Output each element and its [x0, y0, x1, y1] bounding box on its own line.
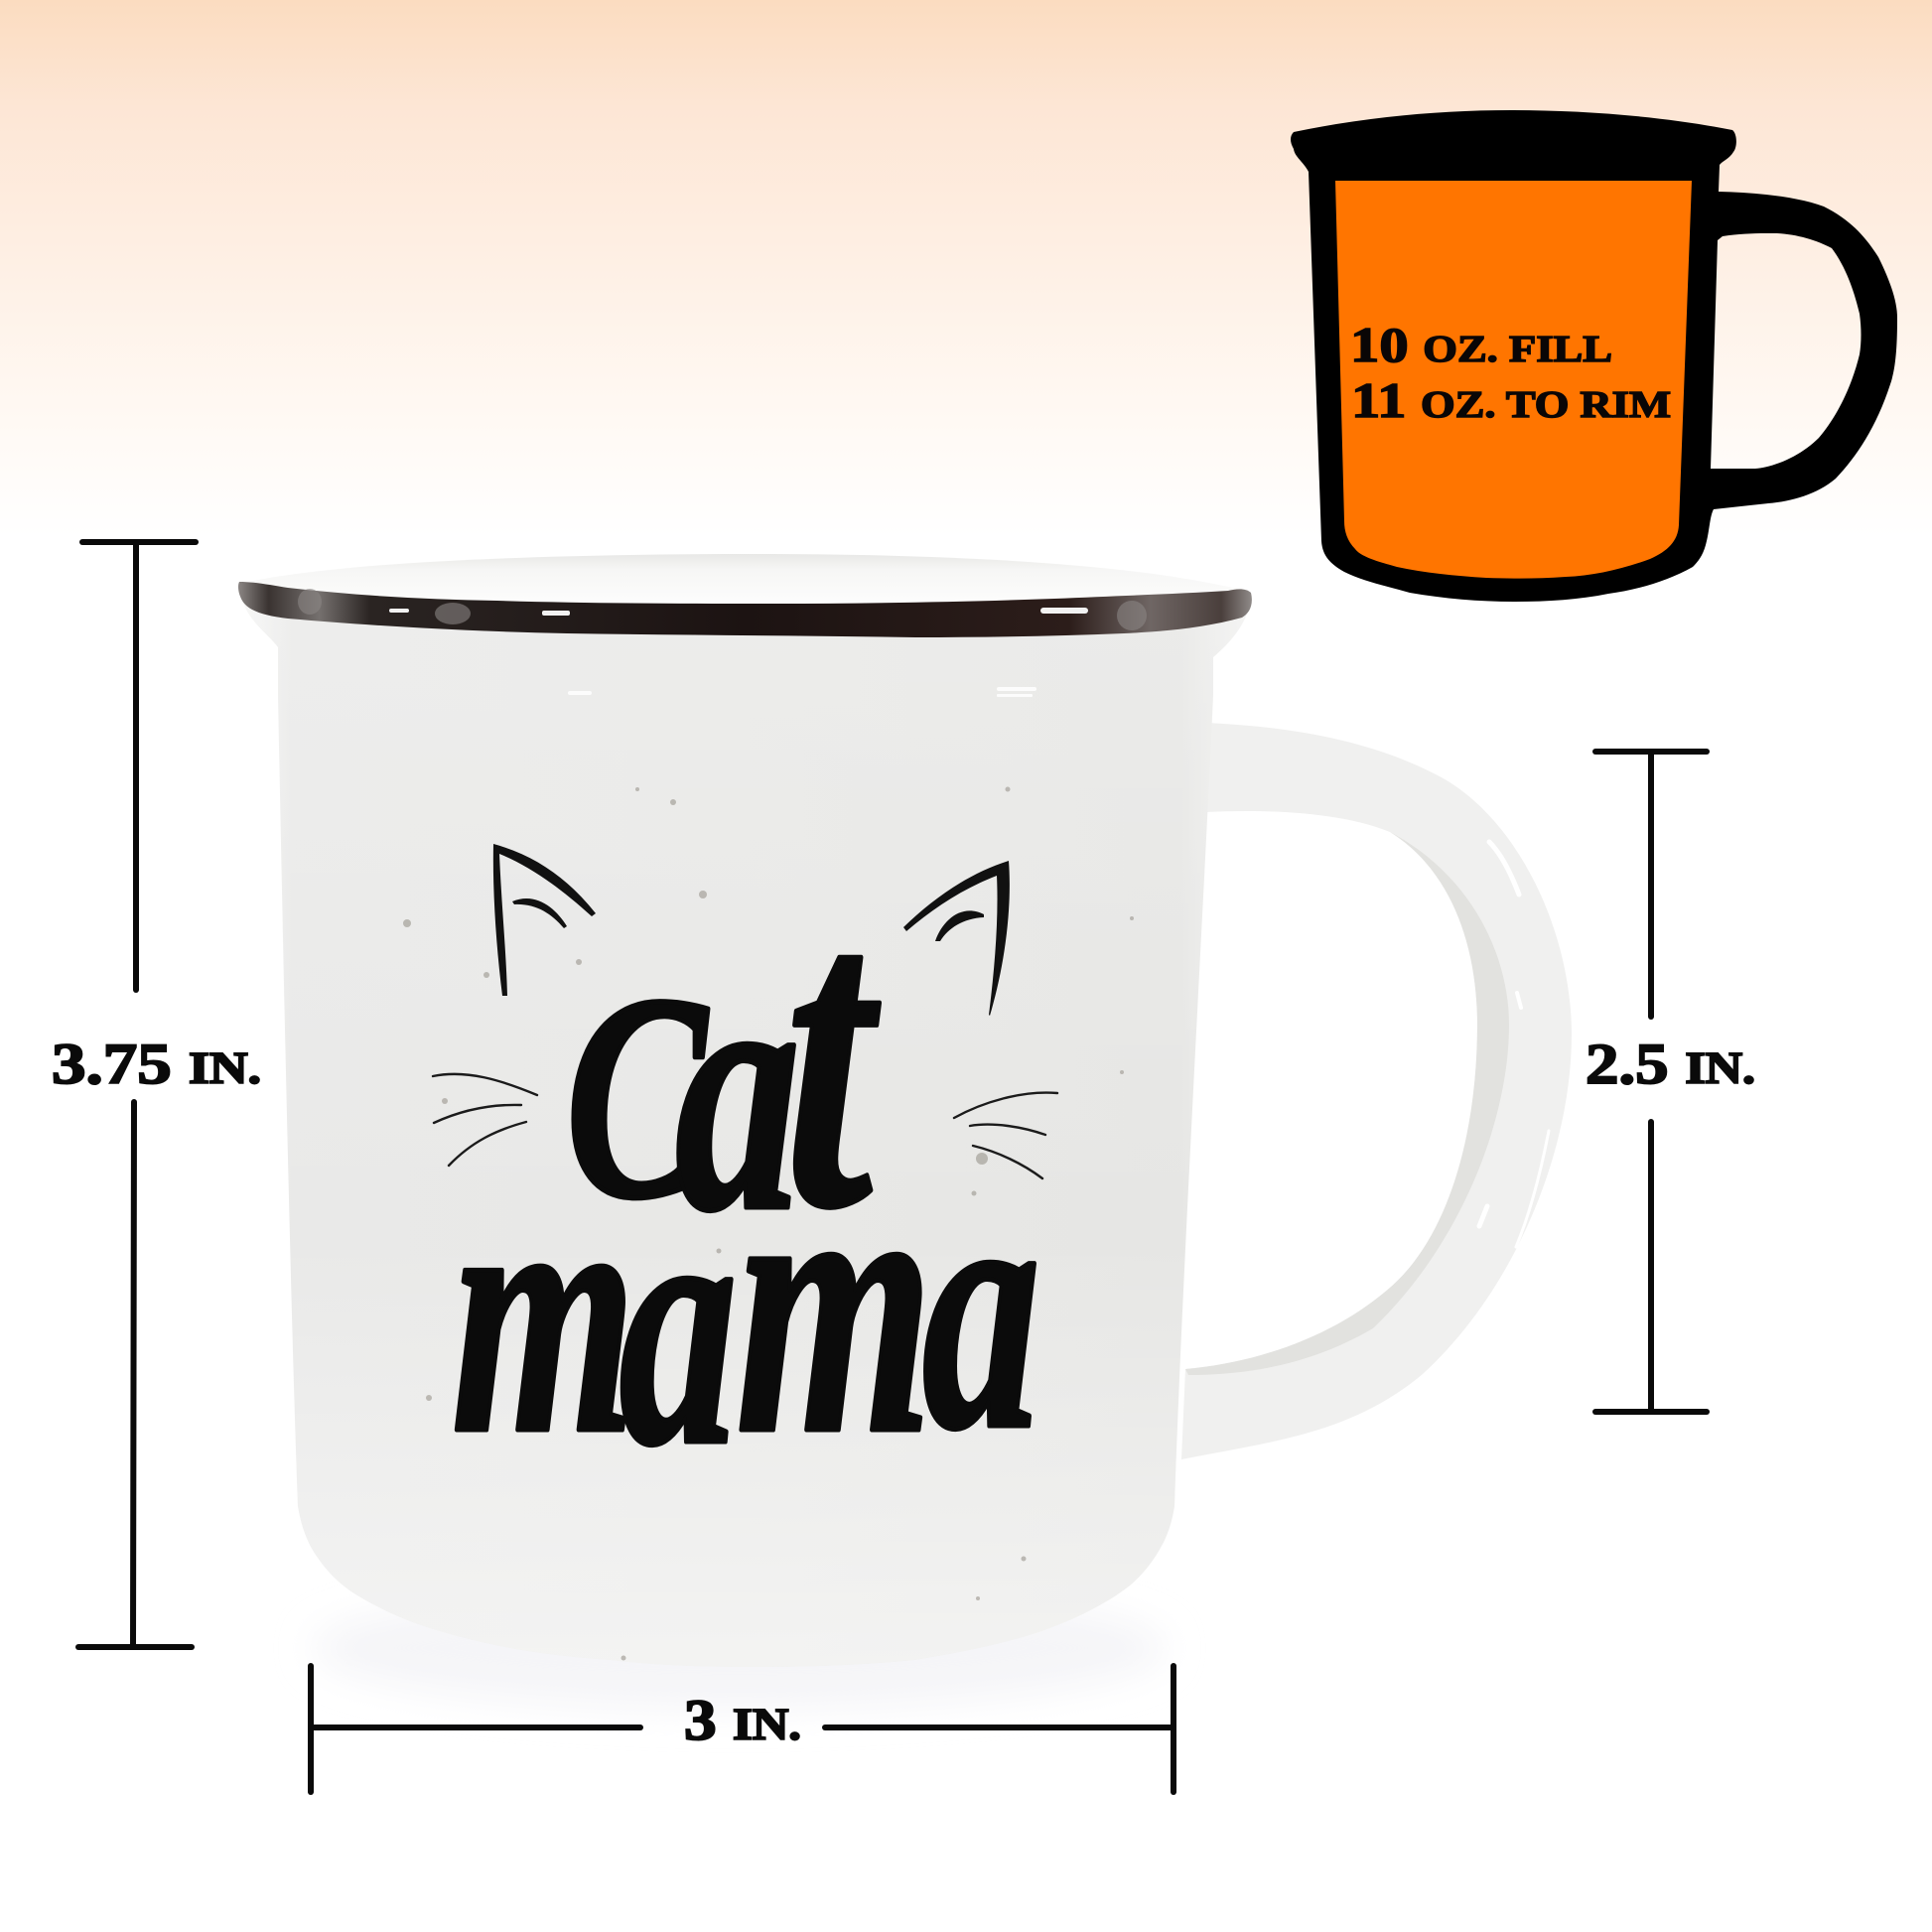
left inner ear: [512, 898, 567, 928]
printed word: Cat: a: [675, 897, 800, 1283]
mug interior: [239, 554, 1249, 616]
width label: 3 IN.: [684, 1688, 801, 1752]
orange fill: [1335, 181, 1692, 579]
capacity text: [1350, 317, 1671, 428]
handle inner shading: [1185, 832, 1509, 1375]
handle ruler: [1595, 752, 1707, 1412]
rim volume: 11 OZ. TO RIM: [1351, 372, 1671, 428]
right inner ear: [935, 910, 984, 941]
width ruler: [311, 1666, 1173, 1792]
mug shadow: [313, 1587, 1167, 1710]
printed word: mama: m: [736, 1099, 933, 1511]
mug body: [241, 596, 1251, 1667]
left ear: [493, 844, 596, 996]
printed word: mama: m: [452, 1120, 635, 1505]
right ear: [903, 861, 1010, 1016]
body light overlay: [241, 596, 1251, 1667]
rim highlights: [389, 608, 1088, 616]
printed word: mama: a: [620, 1132, 738, 1517]
dark metallic rim band: [238, 582, 1252, 637]
height label: 3.75 IN.: [52, 1032, 261, 1096]
printed cat whiskers: [433, 1074, 1057, 1178]
capacity mug icon: [1291, 110, 1897, 602]
printed word: Cat: C: [566, 934, 711, 1259]
height ruler: [78, 542, 196, 1647]
handle highlights: [1479, 842, 1549, 1247]
black mug silhouette: [1291, 110, 1897, 602]
handle label: 2.5 IN.: [1586, 1032, 1755, 1096]
fill volume: 10 OZ. FILL: [1350, 317, 1612, 372]
speckles: [403, 786, 1134, 1660]
mug handle: [1181, 723, 1572, 1459]
metallic patches: [298, 589, 1147, 630]
photo: white enamel mug: [238, 554, 1572, 1710]
body glints: [568, 687, 1036, 697]
printed cat ears: [493, 844, 1010, 1016]
printed word: Cat: t: [784, 813, 883, 1298]
printed word: mama: a: [922, 1116, 1040, 1501]
background gradient: [0, 0, 1932, 536]
